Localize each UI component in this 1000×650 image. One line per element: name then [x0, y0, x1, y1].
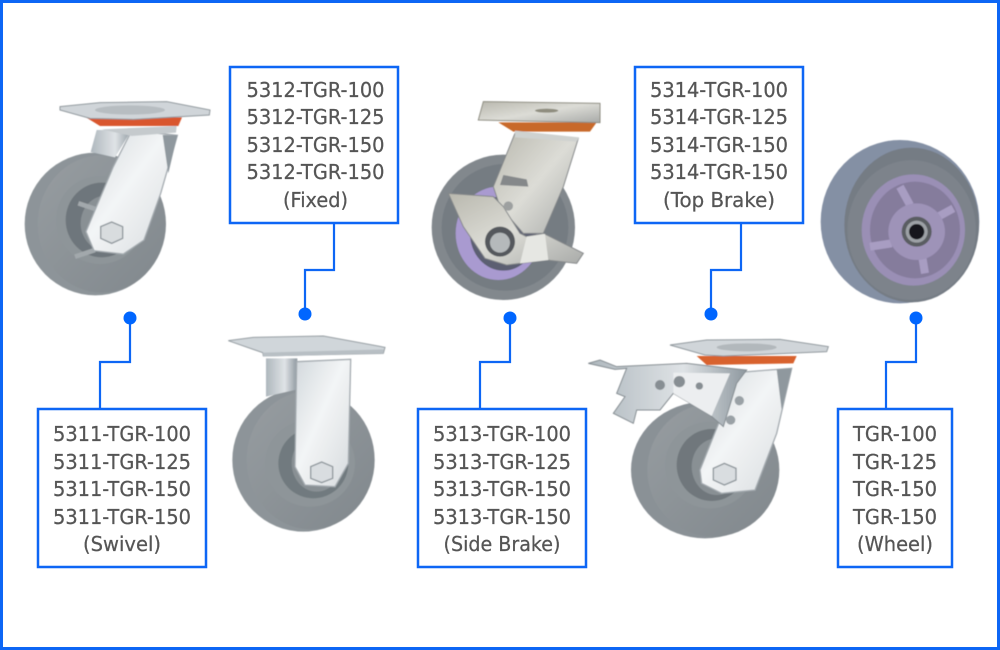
callout: wheel part numbers: TGR-125	[852, 450, 937, 474]
connector: swivel	[100, 312, 136, 409]
callout: side brake part numbers: (Side Brake)	[444, 532, 560, 556]
callout: side brake part numbers: 5313-TGR-125	[433, 450, 571, 474]
callout: wheel part numbers: TGR-150	[852, 477, 937, 501]
connector: top brake	[704, 223, 741, 320]
callout: top brake part numbers	[635, 67, 803, 223]
callout: top brake part numbers: 5314-TGR-125	[650, 105, 788, 129]
callout: side brake part numbers: 5313-TGR-150	[433, 477, 571, 501]
connector: side brake	[480, 312, 516, 409]
callout: top brake part numbers: 5314-TGR-150	[650, 160, 788, 184]
callout: fixed part numbers	[230, 67, 398, 223]
callout: fixed part numbers: 5312-TGR-125	[246, 105, 384, 129]
callout: swivel part numbers: 5311-TGR-125	[53, 450, 191, 474]
caster photo: side brake	[432, 102, 600, 300]
callout: wheel part numbers	[838, 409, 952, 567]
wheel photo	[821, 140, 979, 303]
callout: fixed part numbers: 5312-TGR-150	[246, 133, 384, 157]
caster photo: top brake	[588, 339, 828, 538]
callout: side brake part numbers	[418, 409, 586, 567]
callout: wheel part numbers: (Wheel)	[857, 532, 933, 556]
connector: wheel	[886, 312, 922, 409]
callout: top brake part numbers: 5314-TGR-100	[650, 78, 788, 102]
connector: fixed	[298, 223, 334, 320]
callout: top brake part numbers: (Top Brake)	[663, 188, 775, 212]
callout: swivel part numbers: 5311-TGR-150	[53, 477, 191, 501]
callout: swivel part numbers: 5311-TGR-100	[53, 422, 191, 446]
caster photo: fixed	[228, 336, 385, 532]
callout: wheel part numbers: TGR-100	[852, 422, 937, 446]
callout: swivel part numbers: (Swivel)	[83, 532, 161, 556]
caster photo: swivel	[25, 102, 210, 295]
callout: fixed part numbers: 5312-TGR-100	[246, 78, 384, 102]
callout: fixed part numbers: 5312-TGR-150	[246, 160, 384, 184]
callout: fixed part numbers: (Fixed)	[283, 188, 348, 212]
callout: wheel part numbers: TGR-150	[852, 505, 937, 529]
callout: top brake part numbers: 5314-TGR-150	[650, 133, 788, 157]
callout: side brake part numbers: 5313-TGR-100	[433, 422, 571, 446]
callout: swivel part numbers: 5311-TGR-150	[53, 505, 191, 529]
callout: side brake part numbers: 5313-TGR-150	[433, 505, 571, 529]
callout: swivel part numbers	[38, 409, 206, 567]
